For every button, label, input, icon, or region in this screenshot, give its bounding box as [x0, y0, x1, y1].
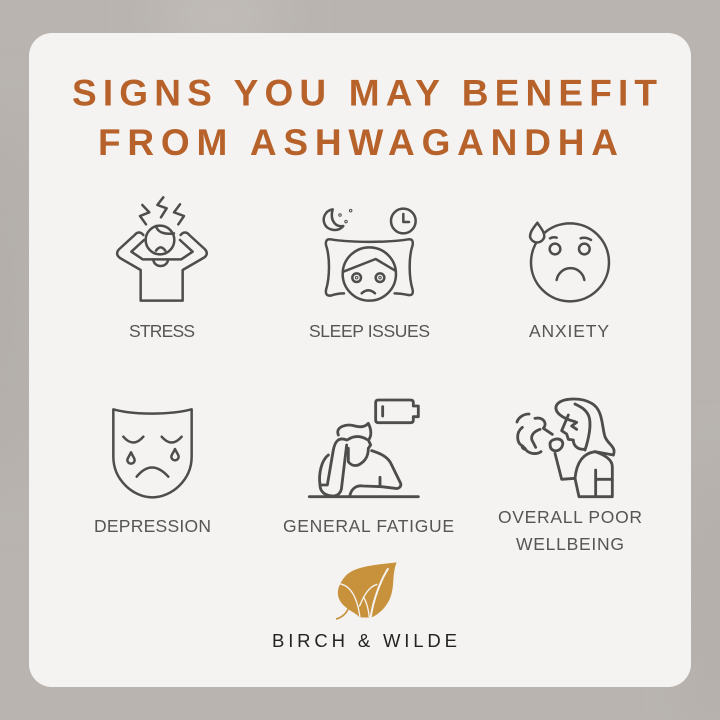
icon: anxiety [530, 223, 609, 301]
label: overall poor wellbeing [498, 507, 642, 554]
label: depression: DEPRESSION [94, 516, 211, 536]
logo: birch leaf [336, 562, 397, 619]
label: anxiety: ANXIETY [529, 321, 609, 341]
title [72, 72, 657, 163]
icon: depression mask [113, 409, 192, 497]
icon: sleep issues [324, 209, 416, 301]
label: overall poor wellbeing: WELLBEING [516, 534, 624, 554]
icon: stress [117, 197, 207, 301]
label: sleep issues: SLEEP ISSUES [309, 321, 430, 341]
title: SIGNS YOU MAY BENEFIT [72, 72, 657, 114]
title: FROM ASHWAGANDHA [98, 122, 618, 163]
label: overall poor wellbeing: OVERALL POOR [498, 507, 642, 527]
icon: overall poor wellbeing [517, 399, 614, 497]
icon: general fatigue [309, 400, 418, 497]
label: stress: STRESS [129, 321, 195, 341]
logo text: BIRCH & WILDE [272, 630, 457, 651]
label: general fatigue: GENERAL FATIGUE [283, 516, 454, 536]
